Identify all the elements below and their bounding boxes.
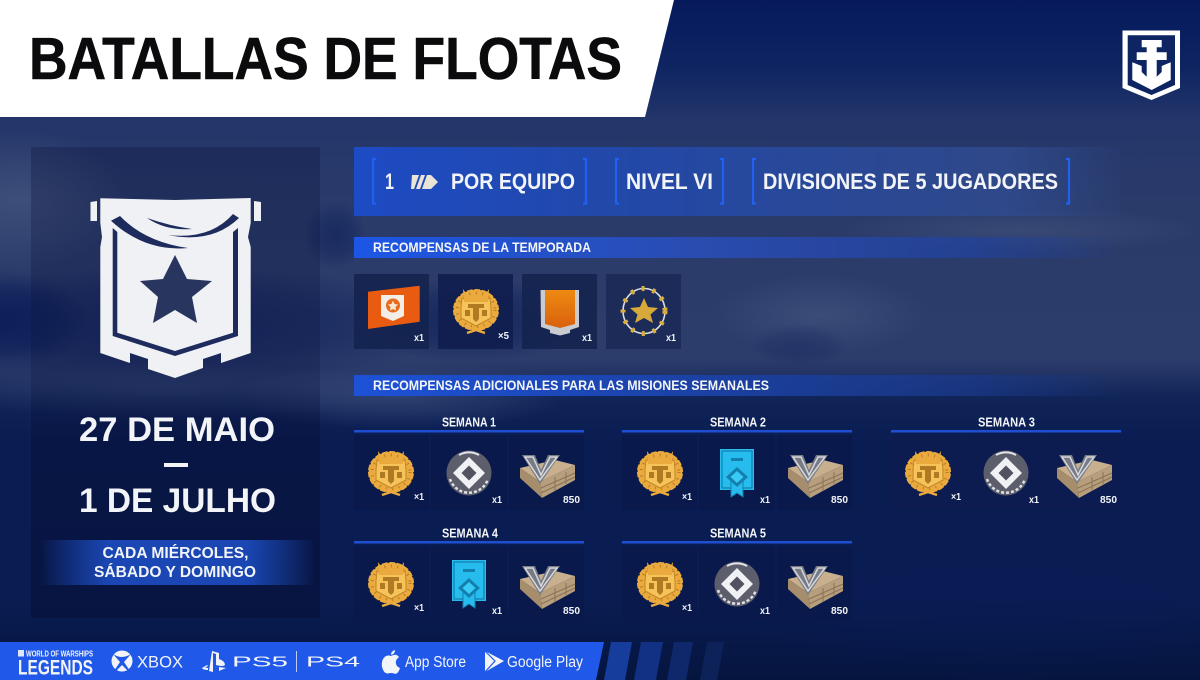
reward: orange flag: x1 [414, 332, 424, 344]
logo: World of Warships Legends: LEGENDS [18, 656, 93, 680]
end date: 1 DE JULHO [79, 482, 276, 520]
panel: week 1 [354, 416, 584, 510]
footer stripes [604, 642, 724, 680]
heading: weekly rewards [354, 375, 1120, 396]
panel: week 5: SEMANA 5 [710, 526, 766, 540]
title banner: BATALLAS DE FLOTAS [29, 26, 622, 92]
logo: World of Warships Legends: WORLD OF WARSHIPS [26, 650, 93, 658]
reward: gold medal: ×5 [498, 330, 509, 342]
panel: season dates [31, 147, 320, 618]
reward: orange banner: x1 [582, 332, 592, 344]
panel: week 3: x1 [1029, 494, 1039, 506]
panel: week 5: x1 [760, 605, 770, 617]
panel: week 1: ×1 [414, 491, 424, 503]
date dash [164, 463, 188, 467]
reward: orange flag [354, 274, 429, 349]
icon: game shield logo [1122, 30, 1180, 100]
logo: Xbox [112, 650, 183, 672]
schedule band [40, 540, 315, 585]
team size: 1 [385, 169, 394, 194]
reward: orange banner [522, 274, 597, 349]
schedule band: CADA MIÉRCOLES, [102, 543, 248, 562]
panel: week 1: SEMANA 1 [442, 416, 496, 430]
panel: week 4: 850 [563, 605, 580, 617]
per team: POR EQUIPO [451, 169, 575, 194]
panel: week 3 [891, 416, 1121, 510]
tier: NIVEL VI [626, 169, 713, 194]
logo: Xbox: XBOX [137, 652, 183, 672]
icon: banner with star [90, 198, 261, 378]
brackets [373, 159, 1069, 204]
panel: week 2: SEMANA 2 [710, 416, 766, 430]
panel: week 5: 850 [831, 605, 848, 617]
panel: week 1: x1 [492, 494, 502, 506]
logo: World of Warships Legends [18, 650, 93, 680]
logo: Google Play: Google Play [507, 654, 583, 671]
panel: battle format [354, 147, 1120, 216]
icon: ship class [411, 175, 438, 189]
heading: season rewards: RECOMPENSAS DE LA TEMPORADA [373, 240, 591, 255]
footer: platforms bar [0, 642, 604, 680]
panel: week 5: ×1 [682, 602, 692, 614]
logo: App Store [382, 650, 466, 674]
divisions: DIVISIONES DE 5 JUGADORES [763, 169, 1058, 194]
panel: week 4 [354, 526, 584, 621]
panel: week 3: SEMANA 3 [978, 416, 1035, 430]
panel: week 2 [622, 416, 852, 510]
panel: week 2: x1 [760, 494, 770, 506]
reward: gold medal [438, 274, 513, 349]
panel: week 3: 850 [1100, 494, 1117, 506]
logo: Google Play [485, 651, 583, 672]
logo: PlayStation 5 and 4: PS5 [232, 654, 288, 670]
panel: week 2: 850 [831, 494, 848, 506]
reward: gold star emblem [606, 274, 681, 349]
heading: weekly rewards: RECOMPENSAS ADICIONALES PARA LAS MISIONES SEMANALES [373, 378, 769, 393]
panel: week 4: x1 [492, 605, 502, 617]
panel: week 3: ×1 [951, 491, 961, 503]
start date: 27 DE MAIO [79, 411, 275, 449]
panel: week 1: 850 [563, 494, 580, 506]
panel: week 4: SEMANA 4 [442, 526, 498, 540]
panel: week 2: ×1 [682, 491, 692, 503]
title banner [0, 0, 674, 117]
heading: season rewards [354, 237, 1120, 258]
logo: PlayStation 5 and 4: PS4 [306, 654, 360, 670]
panel: week 4: ×1 [414, 602, 424, 614]
reward: gold star emblem: x1 [666, 332, 676, 344]
panel: week 5 [622, 526, 852, 621]
schedule band: SÁBADO Y DOMINGO [94, 562, 256, 581]
panel: season reward tiles [354, 274, 681, 349]
logo: PlayStation 5 and 4 [202, 651, 360, 672]
logo: App Store: App Store [405, 654, 466, 671]
